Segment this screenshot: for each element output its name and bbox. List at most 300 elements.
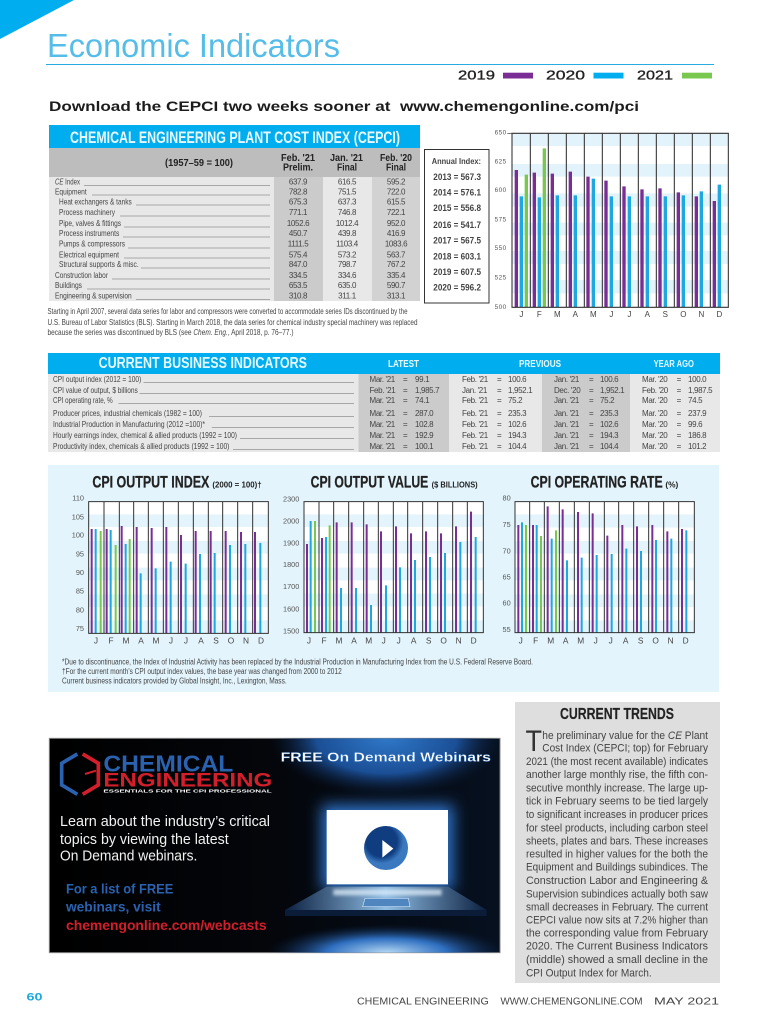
panel: current business indicators: Mar. '21 bbox=[370, 420, 396, 429]
legend: 2019 bbox=[458, 68, 495, 82]
panel: CEPCI table: 439.8 bbox=[338, 229, 357, 238]
legend bbox=[458, 68, 712, 82]
panel: CEPCI table bbox=[49, 125, 420, 301]
chart: CPI output value: S bbox=[426, 636, 432, 646]
panel: CEPCI table: Feb. '21 bbox=[281, 153, 315, 164]
corner triangle bbox=[0, 0, 74, 39]
chart footnotes: Current business indicators provided by Global Insight, Inc., Lexington, Mass. bbox=[62, 676, 287, 686]
panel: CEPCI table: 637.3 bbox=[338, 197, 357, 206]
panel: current trends: for steel products, including carbon steel bbox=[526, 822, 708, 834]
chart: CPI operating rate: 80 bbox=[503, 493, 511, 502]
chart: CPI operating rate: F bbox=[533, 636, 538, 646]
chart: CEPCI monthly: A bbox=[645, 310, 651, 319]
panel: charts background bbox=[48, 465, 719, 692]
panel: current business indicators: = bbox=[677, 396, 682, 405]
panel: current trends: CEPCI value now sits at 7.2% higher than bbox=[526, 914, 708, 926]
panel: current business indicators: Mar. '20 bbox=[642, 442, 668, 451]
icon: chemical engineering logo: CHEMICAL bbox=[103, 751, 233, 777]
panel: current trends: (middle) showed a small decline in the bbox=[526, 954, 708, 966]
chart: CEPCI monthly: 600 bbox=[495, 187, 507, 194]
panel: CEPCI table: 1083.6 bbox=[385, 240, 408, 249]
panel: current business indicators: CPI value of output, $ billions bbox=[53, 386, 138, 395]
panel: current trends bbox=[515, 702, 720, 983]
title: Economic Indicators bbox=[47, 27, 340, 64]
chart: CEPCI monthly: M bbox=[590, 310, 597, 319]
chart: CPI operating rate: O bbox=[652, 636, 659, 646]
panel: CEPCI table: 334.5 bbox=[289, 271, 308, 280]
panel: CEPCI table: (1957–59 = 100) bbox=[165, 158, 233, 169]
chart: CEPCI monthly: N bbox=[698, 310, 704, 319]
chart: CEPCI monthly: 550 bbox=[495, 245, 507, 252]
panel: CEPCI table: 1052.6 bbox=[287, 219, 310, 228]
panel: CEPCI table: 573.2 bbox=[338, 250, 357, 259]
panel: current business indicators: Feb. '20 bbox=[642, 386, 669, 395]
download line: Download the CEPCI two weeks sooner at www.chemengonline.com/pci bbox=[49, 99, 639, 114]
panel: CEPCI table: Pumps & compressors bbox=[59, 240, 125, 249]
panel: CEPCI table: 771.1 bbox=[289, 208, 308, 217]
panel: current business indicators: 235.3 bbox=[600, 409, 619, 418]
panel: current trends: sheets, plates and bars. These increases bbox=[526, 836, 709, 848]
panel: current business indicators: Mar. '20 bbox=[642, 396, 668, 405]
annual index box: 2019 = 607.5 bbox=[433, 267, 481, 277]
panel: current business indicators: Industrial Production in Manufacturing (2012 =100)* bbox=[53, 420, 206, 429]
panel: current trends: he preliminary value for the CE Plant bbox=[542, 730, 708, 742]
panel: current business indicators: Mar. '21 bbox=[370, 431, 396, 440]
chart: CPI output index: F bbox=[108, 636, 114, 646]
panel: CEPCI table: 590.7 bbox=[387, 281, 406, 290]
panel: CEPCI table: 635.0 bbox=[338, 281, 357, 290]
panel: current business indicators: = bbox=[677, 386, 682, 395]
chart: CPI operating rate: (%) bbox=[665, 480, 678, 490]
chart: CPI operating rate bbox=[503, 473, 694, 646]
legend: 2021 bbox=[637, 68, 673, 82]
panel: current business indicators: = bbox=[497, 431, 502, 440]
chart: CPI operating rate: 75 bbox=[503, 520, 511, 529]
panel: current business indicators: = bbox=[589, 442, 594, 451]
chart: CPI operating rate: J bbox=[519, 636, 523, 646]
panel: CEPCI table: 847.0 bbox=[289, 260, 308, 269]
panel: current business indicators: = bbox=[403, 386, 408, 395]
panel: current business indicators: = bbox=[677, 442, 682, 451]
panel: current business indicators: = bbox=[589, 409, 594, 418]
panel: current business indicators: = bbox=[589, 386, 594, 395]
panel: current business indicators: Producer prices, industrial chemicals (1982 = 100) bbox=[53, 409, 202, 418]
annual index box: 2013 = 567.3 bbox=[433, 172, 481, 182]
annual index box: 2017 = 567.5 bbox=[433, 236, 481, 246]
panel: current business indicators: 100.0 bbox=[688, 375, 707, 384]
panel: current business indicators: Jan. '21 bbox=[554, 396, 580, 405]
ad call to action bbox=[65, 880, 267, 933]
panel: CEPCI table: Engineering & supervision bbox=[55, 292, 132, 301]
panel: advertisement bbox=[48, 738, 500, 954]
panel: CEPCI table: 311.1 bbox=[338, 292, 357, 301]
panel: current trends: CURRENT TRENDS bbox=[560, 706, 674, 723]
chart: CEPCI monthly: S bbox=[663, 310, 668, 319]
panel: current business indicators: = bbox=[497, 375, 502, 384]
annual index box: 2020 = 596.2 bbox=[433, 283, 481, 293]
panel: current business indicators bbox=[48, 353, 720, 452]
panel: current trends: Equipment and Buildings subindices. The bbox=[526, 862, 708, 874]
chart: CPI output index bbox=[72, 473, 268, 646]
panel: CEPCI table: Prelim. bbox=[283, 162, 313, 174]
panel: current trends: tick in February seems to be tied largely bbox=[526, 796, 709, 808]
panel: current business indicators: = bbox=[677, 420, 682, 429]
panel: current business indicators: Jan. '21 bbox=[554, 409, 580, 418]
chart: CPI output value: ($ BILLIONS) bbox=[432, 480, 478, 490]
chart: CPI output value: 1700 bbox=[283, 582, 299, 591]
panel: CEPCI table: 767.2 bbox=[387, 260, 406, 269]
panel: current business indicators: = bbox=[497, 386, 502, 395]
panel: CEPCI table: Process machinery bbox=[59, 208, 116, 217]
panel: current business indicators: PREVIOUS bbox=[519, 358, 561, 370]
panel: CEPCI table: 746.8 bbox=[338, 208, 357, 217]
chart: CPI output value: D bbox=[471, 636, 477, 646]
annual index box: 2015 = 556.8 bbox=[433, 203, 481, 213]
panel: CEPCI table: 751.5 bbox=[338, 187, 357, 196]
panel: current trends: T bbox=[526, 725, 542, 758]
panel: current business indicators: Feb. '21 bbox=[370, 386, 396, 395]
chart: CPI output value: N bbox=[456, 636, 462, 646]
panel: CEPCI table: Construction labor bbox=[55, 271, 108, 280]
panel: current business indicators: 237.9 bbox=[688, 409, 707, 418]
chart: CPI output index: 110 bbox=[72, 494, 84, 503]
panel: current business indicators: Feb. '21 bbox=[462, 442, 489, 451]
chart: CPI operating rate: A bbox=[623, 636, 629, 646]
panel: current business indicators: = bbox=[589, 420, 594, 429]
chart: CPI output value: 2000 bbox=[283, 516, 299, 525]
panel: current business indicators: Jan. '21 bbox=[554, 420, 580, 429]
panel: CEPCI table: 615.5 bbox=[387, 197, 406, 206]
icon: chemical engineering logo bbox=[62, 751, 272, 794]
panel: current business indicators: 194.3 bbox=[508, 431, 527, 440]
panel: current business indicators: = bbox=[403, 420, 408, 429]
panel: current business indicators: = bbox=[403, 409, 408, 418]
panel: CEPCI table: 653.5 bbox=[289, 281, 308, 290]
panel: current business indicators: 100.1 bbox=[415, 442, 434, 451]
legend: 2020 bbox=[546, 68, 585, 82]
chart: CPI operating rate: S bbox=[638, 636, 644, 646]
panel: CEPCI table: 310.8 bbox=[289, 292, 308, 301]
chart: CEPCI monthly: F bbox=[537, 310, 542, 319]
chart: CPI output index: A bbox=[138, 636, 144, 646]
panel: current trends: CPI Output Index for March. bbox=[526, 967, 652, 979]
chart: CEPCI monthly: J bbox=[627, 310, 631, 319]
panel: current business indicators: Mar. '20 bbox=[642, 409, 668, 418]
chart: CPI output index: N bbox=[243, 636, 249, 646]
panel: current business indicators: 100.6 bbox=[600, 375, 619, 384]
chart: CPI operating rate: 60 bbox=[503, 599, 511, 608]
chart: CPI output value: 2300 bbox=[283, 495, 299, 504]
chart: CPI output index: A bbox=[198, 636, 204, 646]
panel: current business indicators: Jan. '21 bbox=[554, 375, 580, 384]
panel: current business indicators: LATEST bbox=[388, 358, 419, 370]
CEPCI footnote bbox=[48, 307, 418, 337]
panel: current business indicators: = bbox=[677, 409, 682, 418]
panel: CEPCI table: 782.8 bbox=[289, 187, 308, 196]
ad body text: topics by viewing the latest bbox=[60, 832, 229, 848]
panel: current trends: small decreases in February. The current bbox=[526, 901, 708, 913]
panel: CEPCI table: 952.0 bbox=[387, 219, 406, 228]
panel: current trends: Supervision subindices actually both saw bbox=[526, 888, 708, 900]
panel: current business indicators: = bbox=[403, 431, 408, 440]
panel: CEPCI table: Equipment bbox=[55, 187, 87, 196]
chart: CPI output value: J bbox=[397, 636, 401, 646]
panel: current business indicators: Hourly earnings index, chemical & allied products (1992 = 100) bbox=[53, 431, 237, 440]
chart: CPI operating rate: 70 bbox=[503, 546, 511, 555]
panel: current business indicators: 99.6 bbox=[688, 420, 703, 429]
panel: current business indicators: Feb. '21 bbox=[462, 375, 489, 384]
chart: CPI output index: J bbox=[184, 636, 188, 646]
panel: current business indicators: = bbox=[403, 396, 408, 405]
panel: CEPCI table: 450.7 bbox=[289, 229, 308, 238]
ad body text: On Demand webinars. bbox=[60, 849, 197, 865]
panel: CEPCI table: 1012.4 bbox=[336, 219, 359, 228]
panel: current business indicators: CURRENT BUSINESS INDICATORS bbox=[99, 355, 307, 372]
panel: current business indicators: 1,987.5 bbox=[688, 386, 713, 395]
chart: CPI output index: J bbox=[169, 636, 173, 646]
panel: current business indicators: 102.6 bbox=[600, 420, 619, 429]
panel: CEPCI table: 416.9 bbox=[387, 229, 406, 238]
annual index box: Annual Index: bbox=[432, 156, 481, 166]
panel: current business indicators: = bbox=[497, 442, 502, 451]
panel: current business indicators: = bbox=[403, 375, 408, 384]
panel: current business indicators: 194.3 bbox=[600, 431, 619, 440]
chart: CPI output index: 100 bbox=[72, 531, 84, 540]
chart footnotes: *Due to discontinuance, the Index of Industrial Activity has been replaced by the Industrial Production in Manufacturing Index from the U.S. Federal Reserve Board. bbox=[62, 658, 533, 666]
chart: CPI operating rate: CPI OPERATING RATE bbox=[531, 473, 663, 492]
panel: CEPCI table: Structural supports & misc. bbox=[59, 260, 139, 269]
chart: CPI output value: F bbox=[321, 636, 327, 646]
panel: current business indicators: = bbox=[589, 396, 594, 405]
panel: CEPCI table: CE Index bbox=[55, 178, 80, 187]
chart: CPI output index: 80 bbox=[76, 605, 84, 614]
panel: current trends: to significant increases in producer prices bbox=[526, 809, 709, 821]
panel: CEPCI table: 637.9 bbox=[289, 178, 308, 187]
chart: CPI output value: 1600 bbox=[283, 604, 299, 613]
panel: current business indicators: 75.2 bbox=[508, 396, 523, 405]
panel: current business indicators: = bbox=[497, 396, 502, 405]
panel: CEPCI table: Jan. '21 bbox=[330, 153, 363, 164]
chart: CEPCI monthly: 650 bbox=[495, 129, 507, 136]
chart: CPI output value: J bbox=[307, 636, 311, 646]
panel: current business indicators: 74.5 bbox=[688, 396, 703, 405]
chart: CPI operating rate: J bbox=[609, 636, 613, 646]
panel: current trends: Cost Index (CEPCI; top) for February bbox=[542, 742, 709, 754]
ad call to action: chemengonline.com/webcasts bbox=[66, 917, 267, 933]
panel: current business indicators: = bbox=[497, 420, 502, 429]
panel: current business indicators: Feb. '21 bbox=[462, 431, 489, 440]
chart: CEPCI monthly: O bbox=[680, 310, 686, 319]
panel: current business indicators: 99.1 bbox=[415, 375, 430, 384]
ad body text bbox=[60, 814, 270, 865]
chart: CPI operating rate: A bbox=[563, 636, 569, 646]
panel: current business indicators: Feb. '21 bbox=[462, 420, 489, 429]
chart: CEPCI monthly: J bbox=[609, 310, 613, 319]
icon: laptop screen and play button bbox=[327, 810, 448, 884]
panel: current business indicators: 101.2 bbox=[688, 442, 707, 451]
chart: CEPCI monthly bbox=[495, 129, 728, 319]
chart: CPI operating rate: N bbox=[668, 636, 674, 646]
panel: current business indicators: Mar. '21 bbox=[370, 375, 396, 384]
panel: current business indicators: 74.1 bbox=[415, 396, 430, 405]
panel: CEPCI table: 563.7 bbox=[387, 250, 406, 259]
chart: CEPCI monthly: 525 bbox=[495, 274, 507, 281]
panel: current business indicators: 192.9 bbox=[415, 431, 434, 440]
panel: current business indicators: 100.6 bbox=[508, 375, 527, 384]
panel: current business indicators: Jan. '21 bbox=[554, 431, 580, 440]
panel: current business indicators: = bbox=[677, 431, 682, 440]
page number: 60 bbox=[26, 992, 42, 1004]
panel: current trends: the corresponding value from February bbox=[526, 927, 709, 939]
panel: current business indicators: Mar. '21 bbox=[370, 409, 396, 418]
panel: CEPCI table: 335.4 bbox=[387, 271, 406, 280]
chart: CPI output index: S bbox=[213, 636, 219, 646]
panel: current business indicators: = bbox=[403, 442, 408, 451]
panel: CEPCI table: 595.2 bbox=[387, 178, 406, 187]
chart: CEPCI monthly: D bbox=[716, 310, 722, 319]
panel: current business indicators: = bbox=[677, 375, 682, 384]
chart: CPI output index: 105 bbox=[72, 512, 84, 521]
panel: CEPCI table: Process instruments bbox=[59, 229, 119, 238]
chart: CEPCI monthly: A bbox=[573, 310, 579, 319]
chart: CPI operating rate: 65 bbox=[503, 572, 511, 581]
chart: CPI operating rate: D bbox=[683, 636, 689, 646]
panel: CEPCI table: 1103.4 bbox=[336, 240, 359, 249]
chart: CPI output value: M bbox=[365, 636, 372, 646]
panel: current business indicators: 235.3 bbox=[508, 409, 527, 418]
chart: CPI operating rate: M bbox=[577, 636, 584, 646]
footer: WWW.CHEMENGONLINE.COM bbox=[500, 996, 642, 1008]
chart: CPI output value bbox=[283, 473, 483, 646]
chart: CPI output index: 85 bbox=[76, 587, 84, 596]
panel: current business indicators: 186.8 bbox=[688, 431, 707, 440]
ad call to action: For a list of FREE bbox=[66, 880, 173, 896]
annual index box: 2018 = 603.1 bbox=[433, 251, 481, 261]
panel: CEPCI table: Feb. '20 bbox=[380, 153, 412, 164]
chart footnotes bbox=[62, 658, 533, 686]
icon: chemical engineering logo: ENGINEERING bbox=[103, 771, 272, 792]
panel: current trends: resulted in higher values for the both the bbox=[526, 848, 708, 860]
panel: current business indicators: 1,952.1 bbox=[600, 386, 625, 395]
panel: CEPCI table: 722.1 bbox=[387, 208, 406, 217]
panel: CEPCI table: Pipe, valves & fittings bbox=[59, 219, 121, 228]
panel: current business indicators: = bbox=[589, 431, 594, 440]
chart: CPI operating rate: 55 bbox=[503, 625, 511, 634]
panel: current business indicators: Feb. '21 bbox=[462, 409, 489, 418]
panel: CEPCI table: Buildings bbox=[55, 281, 82, 290]
panel: CEPCI table: 334.6 bbox=[338, 271, 357, 280]
panel: current trends: 2021 (the most recent available) indicates bbox=[526, 756, 709, 768]
panel: current trends: 2020. The Current Business Indicators bbox=[526, 941, 709, 953]
annual index box: 2014 = 576.1 bbox=[433, 188, 481, 198]
CEPCI footnote: because the series was discontinued by BLS (see Chem. Eng., April 2018, p. 76–77.) bbox=[48, 328, 294, 337]
panel: current business indicators: Mar. '20 bbox=[642, 375, 668, 384]
panel: CEPCI table: 722.0 bbox=[387, 187, 406, 196]
chart: CPI output index: CPI OUTPUT INDEX bbox=[92, 473, 209, 492]
chart: CPI output value: 1500 bbox=[283, 626, 299, 635]
footer: CHEMICAL ENGINEERING bbox=[357, 996, 489, 1008]
panel: current business indicators: 1,985.7 bbox=[415, 386, 440, 395]
chart: CEPCI monthly: J bbox=[519, 310, 523, 319]
panel: current business indicators: Jan. '21 bbox=[462, 386, 488, 395]
ad body text: Learn about the industry’s critical bbox=[60, 814, 270, 830]
panel: current business indicators: 102.8 bbox=[415, 420, 434, 429]
chart: CPI output value: J bbox=[382, 636, 386, 646]
chart: CPI output index: J bbox=[94, 636, 98, 646]
panel: CEPCI table: Heat exchangers & tanks bbox=[59, 197, 132, 206]
chart: CPI output value: O bbox=[440, 636, 447, 646]
chart: CPI output index: O bbox=[228, 636, 235, 646]
panel: current trends: Construction Labor and Engineering & bbox=[526, 875, 709, 887]
panel: current business indicators: 1,952.1 bbox=[508, 386, 533, 395]
panel: current business indicators: Mar. '21 bbox=[370, 396, 396, 405]
panel: current business indicators: CPI operating rate, % bbox=[53, 396, 113, 405]
panel: CEPCI table: 575.4 bbox=[289, 250, 308, 259]
panel: current business indicators: = bbox=[589, 375, 594, 384]
panel: CEPCI table: 616.5 bbox=[338, 178, 357, 187]
panel: CEPCI table: 313.1 bbox=[387, 292, 406, 301]
chart: CPI output value: M bbox=[336, 636, 343, 646]
panel: current trends: secutive monthly increase. The large up- bbox=[526, 782, 708, 794]
chart: CEPCI monthly: 625 bbox=[495, 159, 507, 166]
annual index box: 2016 = 541.7 bbox=[433, 220, 481, 230]
panel: current business indicators: Mar. '20 bbox=[642, 420, 668, 429]
chart: CPI output value: 1900 bbox=[283, 538, 299, 547]
chart: CPI output index: 75 bbox=[76, 624, 84, 633]
panel: current business indicators: Feb. '21 bbox=[462, 396, 489, 405]
chart: CEPCI monthly: 500 bbox=[495, 304, 507, 311]
panel: current business indicators: YEAR AGO bbox=[654, 358, 694, 370]
chart: CPI operating rate: J bbox=[594, 636, 598, 646]
panel: current business indicators: Productivity index, chemicals & allied products (1992 = 100) bbox=[53, 442, 230, 451]
panel: current business indicators: Mar. '21 bbox=[370, 442, 396, 451]
chart: CPI output value: A bbox=[351, 636, 357, 646]
chart: CPI operating rate: M bbox=[547, 636, 554, 646]
panel: CEPCI table: 1111.5 bbox=[288, 240, 309, 249]
panel: current business indicators: 104.4 bbox=[600, 442, 619, 451]
panel: current business indicators: 287.0 bbox=[415, 409, 434, 418]
chart: CPI output index: 95 bbox=[76, 550, 84, 559]
chart footnotes: †For the current month's CPI output index values, the base year was changed from 2000 to 2012 bbox=[62, 667, 342, 676]
panel: current business indicators: 75.2 bbox=[600, 396, 615, 405]
panel: CEPCI table: Final bbox=[337, 162, 357, 174]
chart: CEPCI monthly: 575 bbox=[495, 217, 507, 224]
panel: CEPCI table: Electrical equipment bbox=[59, 250, 120, 259]
CEPCI footnote: Starting in April 2007, several data series for labor and compressors were converted to accommodate series IDs discontinued by the bbox=[48, 307, 408, 316]
annual index box bbox=[424, 150, 489, 303]
ad call to action: webinars, visit bbox=[65, 899, 161, 915]
chart: CPI output value: CPI OUTPUT VALUE bbox=[311, 473, 428, 492]
footer: MAY 2021 bbox=[654, 996, 719, 1008]
icon: chemical engineering logo: ESSENTIALS FOR THE CPI PROFESSIONAL bbox=[103, 788, 272, 793]
panel: current trends: another large monthly rise, the fifth con- bbox=[526, 769, 708, 781]
chart: CPI output index: D bbox=[258, 636, 264, 646]
chart: CEPCI monthly: M bbox=[554, 310, 561, 319]
panel: current business indicators: = bbox=[497, 409, 502, 418]
panel: CEPCI table: 675.3 bbox=[289, 197, 308, 206]
ad heading: FREE On Demand Webinars bbox=[281, 751, 491, 765]
CEPCI footnote: U.S. Bureau of Labor Statistics (BLS). Starting in March 2018, the data series for chemical industry special machinery was replaced bbox=[48, 318, 418, 327]
chart: CPI output value: 1800 bbox=[283, 560, 299, 569]
panel: CEPCI table: 798.7 bbox=[338, 260, 357, 269]
chart: CPI output index: M bbox=[123, 636, 130, 646]
panel: current business indicators: Mar. '20 bbox=[642, 431, 668, 440]
panel: CEPCI table: Final bbox=[386, 162, 406, 174]
panel: CEPCI table: CHEMICAL ENGINEERING PLANT COST INDEX (CEPCI) bbox=[70, 129, 400, 147]
chart: CPI output value: A bbox=[411, 636, 417, 646]
panel: current business indicators: 102.6 bbox=[508, 420, 527, 429]
panel: current business indicators: 104.4 bbox=[508, 442, 527, 451]
